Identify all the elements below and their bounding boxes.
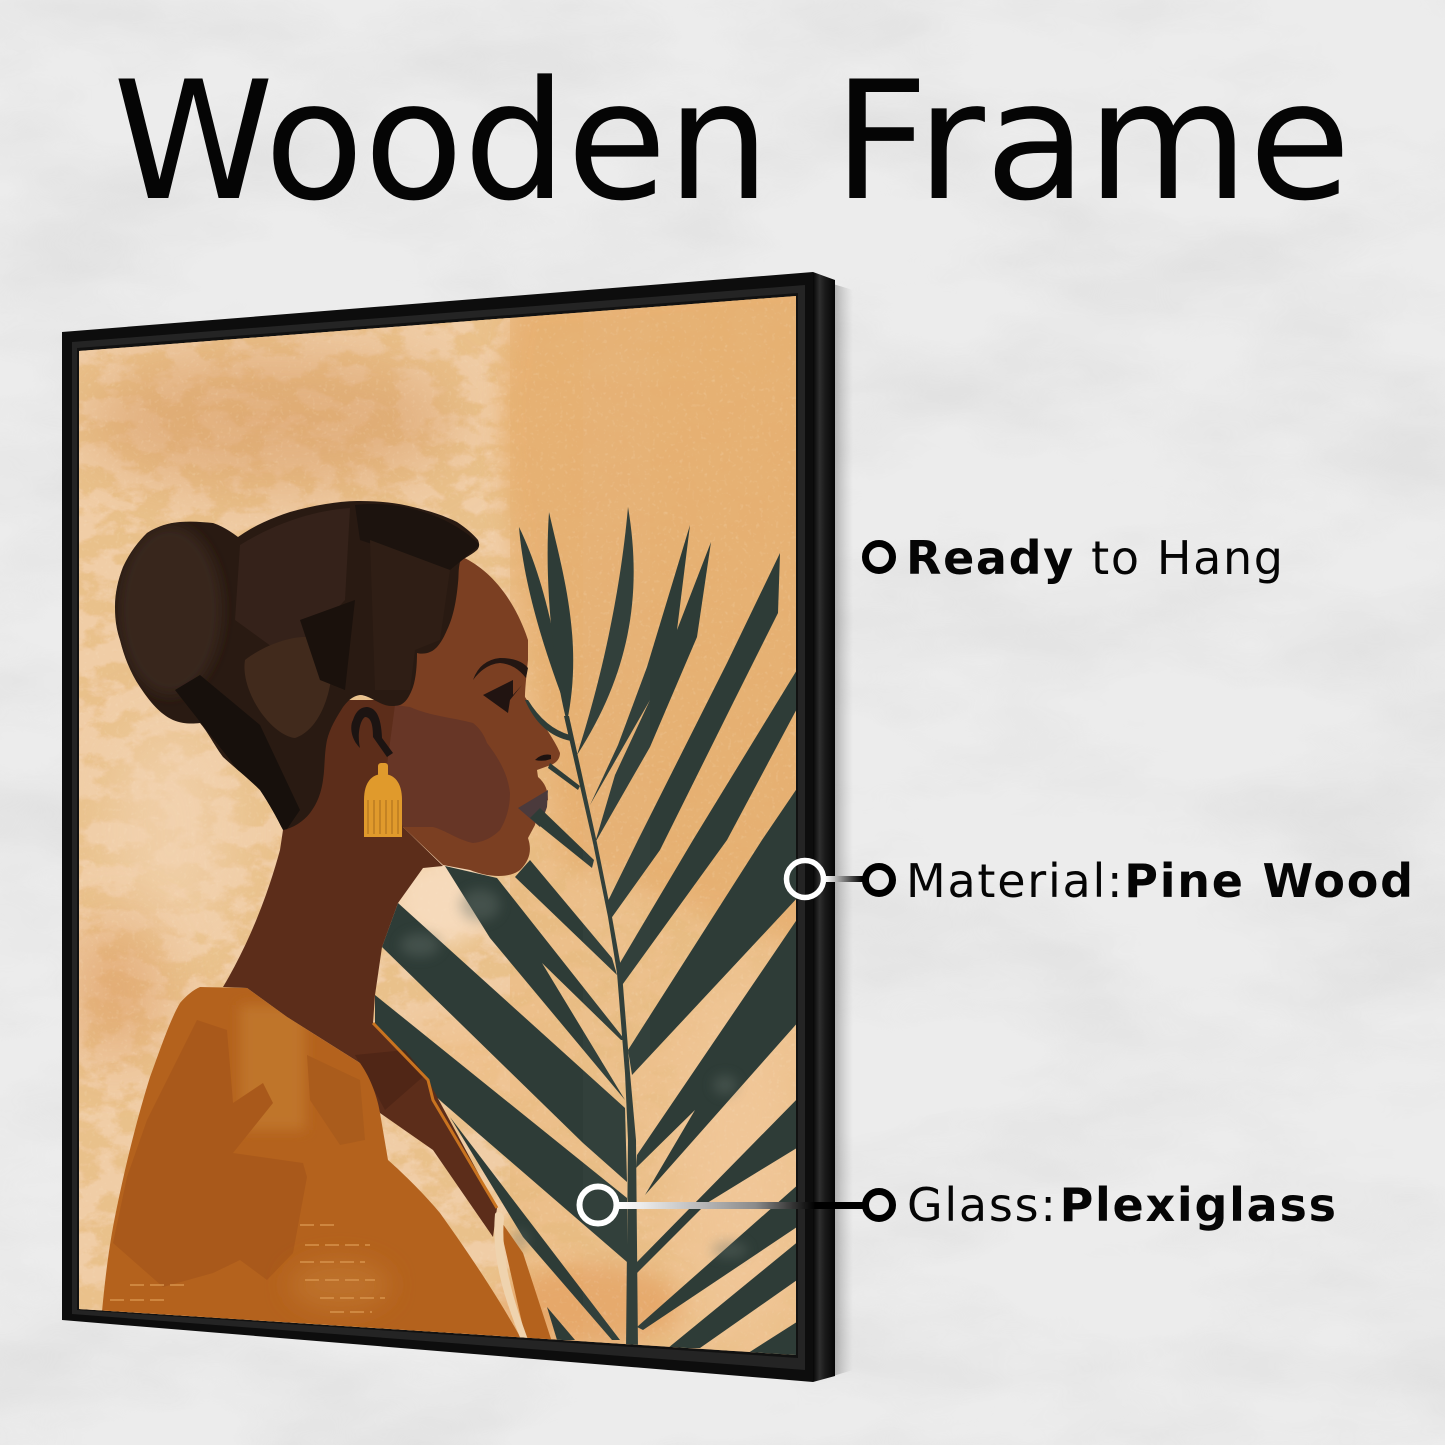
callout: material pine wood [786, 854, 1413, 908]
title: Frame [833, 46, 1351, 237]
eyebrow [473, 658, 528, 680]
nostril [535, 755, 551, 761]
connector line [824, 876, 868, 882]
callout ring [866, 866, 892, 894]
hand highlight [494, 1212, 528, 1338]
title [113, 46, 1351, 237]
hair [115, 501, 480, 830]
callout label: Glass:Plexiglass [907, 1178, 1336, 1232]
leaf worn patches [400, 889, 748, 1258]
frame side panel [813, 272, 835, 1382]
collar folds [355, 1050, 425, 1110]
callout label: Ready to Hang [906, 531, 1283, 585]
left leaflets [515, 860, 617, 975]
mouth leaflet [548, 763, 580, 790]
frame inner bevel [72, 285, 805, 1370]
palm frond behind the figure [375, 507, 800, 1355]
earring [364, 763, 402, 837]
lips [518, 790, 548, 827]
callout: glass plexiglass [580, 1178, 1336, 1232]
pointer ring on frame [786, 860, 824, 898]
right leaflets [636, 915, 800, 1195]
framed poster [60, 270, 853, 1382]
connector line [618, 1202, 868, 1209]
callout ring [866, 1192, 892, 1218]
paper background [79, 296, 796, 1355]
callout label: Material:Pine Wood [906, 854, 1413, 908]
chin leaflet [530, 808, 594, 868]
cheek patch [385, 705, 510, 843]
wall shadow of frame [833, 284, 853, 1376]
robe sleeve [503, 1225, 552, 1340]
poster artwork [79, 296, 796, 1355]
woman figure [90, 490, 594, 1360]
robe neckline edge [373, 1023, 497, 1208]
robe [102, 987, 520, 1338]
neck, side of head and chest [223, 700, 497, 1237]
callout ring [866, 544, 892, 570]
pointer ring on poster [580, 1186, 616, 1224]
nose branch [525, 700, 571, 741]
face [398, 555, 560, 876]
eye [483, 680, 522, 713]
frond stem [564, 716, 638, 1350]
title: Wooden [113, 46, 770, 237]
callout: ready to hang [866, 531, 1283, 585]
frame front [62, 272, 813, 1382]
ear hook [351, 707, 393, 757]
upper leaflets [519, 527, 561, 694]
glass reflection band [583, 295, 650, 1350]
